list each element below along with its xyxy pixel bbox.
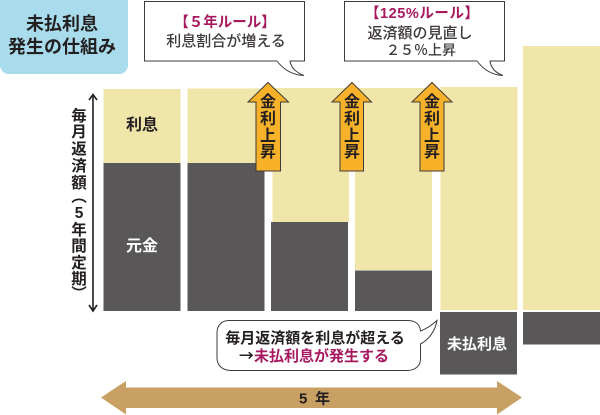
axis label: monthly payment: 間: [71, 237, 87, 255]
label: five years: 5: [299, 390, 307, 408]
bar 6: [523, 46, 600, 344]
bar 2: [188, 88, 264, 311]
axis label: monthly payment: 期: [71, 270, 87, 288]
label: five years: 年: [315, 390, 330, 408]
arrow: rate rise 3: 上: [424, 127, 440, 145]
arrow: rate rise 1: 昇: [260, 143, 276, 161]
callout: 125% rule: [344, 2, 504, 76]
arrow: rate rise 2: 昇: [344, 143, 360, 161]
label: principal: 元金: [126, 236, 158, 255]
arrow: rate rise 3: 利: [424, 110, 440, 128]
callout: 5-year rule: 【５年ルール】: [174, 13, 276, 31]
heading panel: 未払利息: [26, 13, 98, 34]
arrow: rate rise 1: 金: [260, 92, 276, 111]
callout: 5-year rule: 利息割合が増える: [166, 32, 286, 50]
callout: unpaid interest occurs: →未払利息が発生する: [239, 345, 389, 366]
arrow: vertical monthly payment axis: [89, 94, 97, 311]
axis label: monthly payment: 額: [71, 174, 87, 192]
arrow: five-year span: [101, 381, 522, 414]
heading panel: 発生の仕組み: [8, 37, 116, 57]
bar 3: [271, 88, 349, 311]
axis label: monthly payment: 月: [71, 124, 87, 141]
callout: 125% rule: 返済額の見直し: [367, 25, 473, 42]
callout: 125% rule: ２５％上昇: [386, 42, 456, 58]
arrow: rate rise 3: 金: [424, 92, 440, 111]
bar 5: [440, 87, 518, 374]
bar 1: [104, 89, 180, 311]
arrow: rate rise 2: 上: [344, 127, 360, 145]
label: interest: 利息: [126, 115, 158, 134]
arrow: rate rise 1: 利: [260, 110, 276, 128]
axis label: monthly payment: 返: [71, 140, 87, 158]
axis label: monthly payment: （: [70, 188, 86, 204]
bar 4: [355, 88, 432, 311]
arrow: rate rise 3: [412, 82, 452, 171]
label: unpaid interest: 未払利息: [447, 335, 507, 353]
arrow: rate rise 2: 利: [344, 110, 360, 128]
arrow: rate rise 1: [248, 82, 288, 171]
axis label: monthly payment: 済: [71, 157, 87, 175]
axis label: monthly payment: ）: [70, 285, 86, 301]
callout: 5-year rule: [144, 2, 304, 76]
axis label: monthly payment: [70, 106, 87, 301]
axis label: monthly payment: 定: [71, 254, 87, 272]
arrow: rate rise 2: [332, 82, 372, 171]
heading panel: [0, 0, 128, 74]
axis label: monthly payment: 5: [75, 205, 84, 222]
callout: 125% rule: 【125%ルール】: [365, 5, 479, 22]
arrow: rate rise 3: 昇: [424, 143, 440, 161]
axis label: monthly payment: 年: [71, 220, 87, 239]
callout: unpaid interest occurs: 毎月返済額を利息が超える: [225, 329, 405, 347]
arrow: rate rise 1: 上: [260, 127, 276, 145]
callout: unpaid interest occurs: [217, 320, 437, 370]
axis label: monthly payment: 毎: [71, 106, 87, 125]
arrow: rate rise 2: 金: [344, 92, 360, 111]
